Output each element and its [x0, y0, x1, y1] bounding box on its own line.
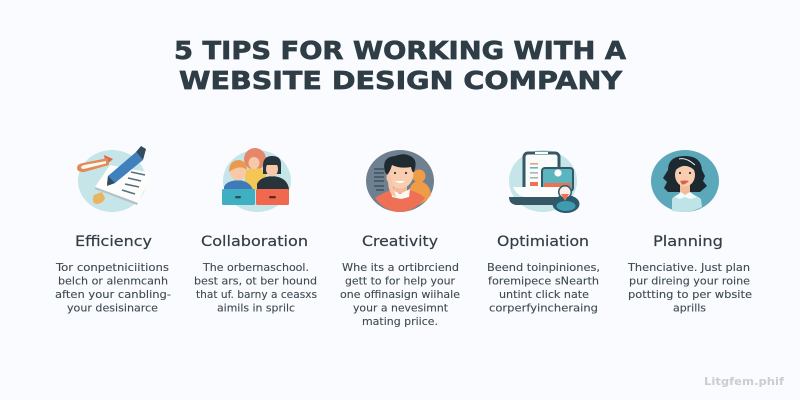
- panel: planning: [627, 150, 752, 314]
- icon: devices: [509, 150, 580, 213]
- text: optimiation description: corperfyincheraing: [489, 302, 598, 314]
- heading: collaboration: Collaboration: [201, 234, 308, 250]
- text: planning description: Thenciative. Just plan: [627, 261, 750, 274]
- icon: pencil and document: [77, 146, 152, 212]
- panel: collaboration: [194, 148, 317, 314]
- text: optimiation description: [487, 261, 600, 314]
- text: collaboration description: best ars, ot ber hound: [194, 274, 317, 288]
- text: efficiency description: aften your canbling-: [55, 288, 171, 301]
- heading: efficiency: Efficiency: [75, 234, 152, 250]
- text: planning description: aprills: [673, 302, 706, 314]
- text: creativity description: [340, 261, 460, 328]
- text: efficiency description: [55, 261, 171, 314]
- text: efficiency description: your desisinarce: [67, 302, 158, 314]
- text: optimiation description: Beend toinpiniones,: [487, 261, 600, 274]
- icon: team with laptops: [222, 148, 291, 212]
- text: creativity description: one offinasign wiihale: [340, 288, 460, 301]
- text: optimiation description: foremipece sNearth: [488, 274, 599, 288]
- text: planning description: pur direing your roine: [629, 274, 750, 288]
- text: creativity description: gett to for help your: [345, 274, 455, 288]
- text: efficiency description: Tor conpetniciitions: [55, 261, 169, 274]
- panel: efficiency: [55, 146, 171, 314]
- title: [174, 36, 627, 95]
- text: creativity description: mating priice.: [362, 315, 438, 328]
- text: efficiency description: belch or alenmcanh: [58, 274, 168, 288]
- text: collaboration description: aimils in sprilc: [217, 302, 295, 314]
- text: creativity description: Whe its a ortibrciend: [342, 261, 459, 274]
- heading: optimiation: Optimiation: [497, 234, 589, 250]
- panel: creativity: [340, 150, 460, 328]
- text: planning description: [627, 261, 752, 314]
- icon: smiling man: [366, 150, 434, 212]
- text: collaboration description: [194, 261, 317, 314]
- title: 5 TIPS FOR WORKING WITH A: [174, 36, 627, 65]
- icon: woman portrait: [651, 150, 719, 212]
- heading: planning: Planning: [653, 234, 723, 250]
- text: creativity description: your a nevesimnt: [353, 302, 449, 314]
- panel: optimization: [487, 150, 600, 314]
- text: collaboration description: The orbernaschool.: [202, 261, 309, 274]
- text: collaboration description: that uf. barny a ceasxs: [196, 288, 317, 301]
- text: optimiation description: untint click nate: [499, 288, 589, 301]
- title: WEBSITE DESIGN COMPANY: [179, 66, 623, 95]
- watermark: Litgfem.phif: [704, 375, 784, 388]
- text: planning description: pottting to per wbsite: [628, 288, 752, 301]
- heading: creativity: Creativity: [362, 234, 438, 250]
